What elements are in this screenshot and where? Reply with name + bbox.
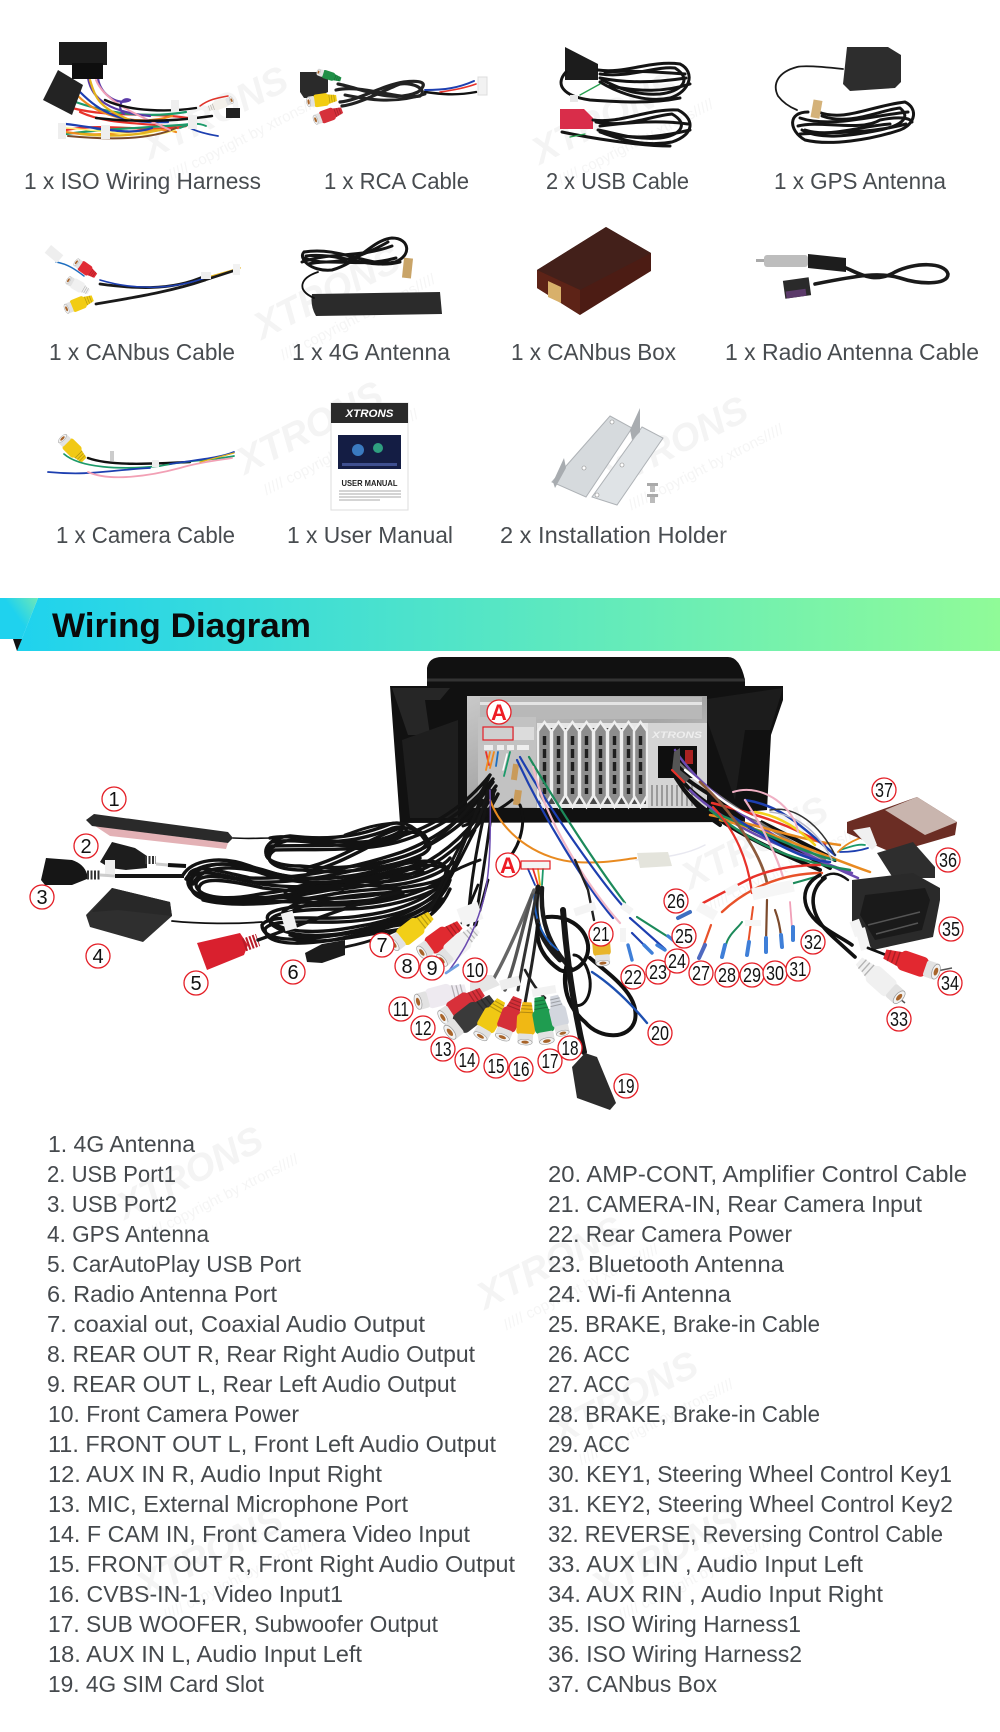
watermarks: XTRONS [543, 1344, 705, 1454]
watermarks: XTRONS [128, 1499, 290, 1609]
accessory captions: 1 x RCA Cable [324, 168, 469, 194]
legend list: items 20-37: 24. Wi-fi Antenna [548, 1281, 731, 1307]
numbered markers: 19 [618, 1076, 634, 1098]
legend list: items 1-19: 14. F CAM IN, Front Camera Video Input [48, 1521, 471, 1547]
4G SIM slot and black loops [537, 910, 647, 1110]
numbered markers: 18 [562, 1038, 578, 1060]
watermarks: XTRONS [523, 64, 685, 174]
lower A bundle [412, 861, 572, 1046]
numbered markers: 2 [80, 836, 92, 858]
watermarks: XTRONS [228, 374, 390, 484]
accessory captions: 2 x USB Cable [546, 168, 689, 194]
accessory captions: 1 x CANbus Box [511, 339, 676, 365]
legend list: items 1-19: 13. MIC, External Microphone Port [48, 1491, 409, 1517]
watermarks: ///// copyright by xtrons///// [261, 405, 422, 499]
orange wire and white connector [490, 800, 705, 868]
label 4 part: GPS antenna [86, 888, 262, 942]
numbered markers: 37 [875, 780, 893, 802]
label 35 part: ISO wiring harness 1 [850, 873, 940, 951]
numbered markers: 12 [414, 1018, 432, 1040]
icon: USB cables [560, 47, 690, 146]
label 36 part: ISO wiring harness 2 [877, 842, 935, 878]
watermarks: XTRONS [583, 1499, 745, 1609]
coiled black cables [183, 775, 498, 943]
numbered markers: 14 [458, 1050, 476, 1072]
numbered markers: 36 [939, 850, 957, 872]
numbered markers: 3 [36, 887, 48, 909]
numbered markers: 10 [466, 960, 484, 982]
watermarks: XTRONS [593, 389, 755, 499]
legend list: items 1-19: 1. 4G Antenna [48, 1131, 195, 1157]
rear camera and colour wires [517, 757, 674, 967]
legend list: items 1-19: 9. REAR OUT L, Rear Left Audio Output [47, 1371, 457, 1397]
rear RCA plugs 7 8 9 [385, 790, 490, 973]
legend list: items 1-19: 16. CVBS-IN-1, Video Input1 [48, 1581, 343, 1607]
legend list: items 1-19: 7. coaxial out, Coaxial Audio Output [47, 1311, 426, 1337]
numbered markers: 21 [592, 924, 610, 946]
icon: 4G antenna [302, 238, 442, 316]
legend list: items 20-37: 35. ISO Wiring Harness1 [548, 1611, 801, 1637]
numbered markers: 28 [718, 965, 736, 987]
watermarks: ///// copyright by xtrons///// [166, 90, 327, 184]
legend list: items 1-19 [47, 1131, 516, 1697]
numbered markers [30, 778, 963, 1098]
legend list: items 1-19: 4. GPS Antenna [47, 1221, 209, 1247]
connector callouts A: A [500, 853, 516, 878]
label 2 part: USB port 1 [100, 842, 186, 874]
legend list: items 1-19: 10. Front Camera Power [48, 1401, 299, 1427]
watermarks: XTRONS [133, 59, 295, 169]
numbered markers: 22 [624, 967, 642, 989]
watermarks: ///// copyright by xtrons///// [141, 1150, 302, 1244]
icon: CANbus box [537, 227, 651, 315]
watermarks: ///// copyright by xtrons///// [278, 270, 439, 364]
icon: RCA cable [300, 68, 487, 126]
numbered markers: 4 [92, 946, 104, 968]
legend list: items 20-37: 27. ACC [548, 1371, 630, 1397]
right side harness [672, 748, 870, 958]
legend list: items 1-19: 17. SUB WOOFER, Subwoofer Output [48, 1611, 439, 1637]
legend list: items 1-19: 18. AUX IN L, Audio Input Left [48, 1641, 363, 1667]
heading band: Wiring Diagram: Wiring Diagram [52, 607, 311, 645]
watermarks: XTRONS [468, 1209, 630, 1319]
connector callouts A: A [491, 700, 507, 725]
numbered markers: 6 [287, 962, 299, 984]
accessory captions: 1 x GPS Antenna [774, 168, 946, 194]
legend list: items 20-37: 26. ACC [548, 1341, 630, 1367]
labels 33 34 parts: AUX RCA plugs [852, 944, 952, 1007]
numbered markers: 16 [512, 1059, 530, 1081]
accessory captions: 1 x CANbus Cable [49, 339, 235, 365]
legend list: items 20-37: 25. BRAKE, Brake-in Cable [548, 1311, 820, 1337]
legend list: items 20-37: 33. AUX LIN , Audio Input Left [548, 1551, 864, 1577]
accessory captions: 1 x Camera Cable [56, 522, 235, 548]
watermarks: ///// copyright by xtrons///// [161, 1530, 322, 1624]
watermarks: XTRONS [108, 1119, 270, 1229]
numbered markers: 25 [675, 926, 693, 948]
numbered markers: 15 [488, 1056, 504, 1078]
legend list: items 20-37: 36. ISO Wiring Harness2 [548, 1641, 802, 1667]
label 1 part: 4G antenna [86, 814, 275, 849]
icon: user manual: XTRONS [344, 408, 394, 420]
head unit rear: XTRONS [651, 730, 702, 740]
numbered markers: 23 [649, 962, 667, 984]
icon: user manual: USER MANUAL [342, 478, 398, 488]
numbered markers: 20 [651, 1023, 669, 1045]
watermarks: ///// copyright by xtrons///// [576, 1375, 737, 1469]
numbered markers: 1 [108, 789, 120, 811]
legend list: items 1-19: 6. Radio Antenna Port [47, 1281, 278, 1307]
legend list: items 1-19: 19. 4G SIM Card Slot [48, 1671, 265, 1697]
legend list: items 1-19: 11. FRONT OUT L, Front Left Audio Output [48, 1431, 497, 1457]
label 37 part: CANbus box [847, 797, 957, 853]
numbered markers: 11 [393, 999, 409, 1021]
numbered markers: 34 [941, 973, 959, 995]
numbered markers: 32 [804, 932, 822, 954]
accessory captions: 1 x ISO Wiring Harness [24, 168, 261, 194]
heading band: Wiring Diagram [0, 598, 1000, 651]
icon: GPS antenna [776, 47, 914, 142]
watermarks: ///// copyright by xtrons///// [556, 95, 717, 189]
panel: wiring diagram [30, 657, 963, 1110]
numbered markers: 13 [434, 1039, 452, 1061]
legend list: items 20-37: 21. CAMERA-IN, Rear Camera Input [548, 1191, 923, 1217]
connector A wiring [463, 752, 523, 862]
legend list: items 1-19: 5. CarAutoPlay USB Port [47, 1251, 302, 1277]
legend list: items 1-19: 15. FRONT OUT R, Front Right Audio Output [48, 1551, 516, 1577]
accessory captions: 2 x Installation Holder [500, 522, 727, 548]
numbered markers: 8 [401, 956, 413, 978]
numbered markers: 17 [542, 1051, 558, 1073]
label 6 part: radio antenna port [305, 790, 488, 963]
head unit rear [390, 657, 783, 823]
legend list: items 20-37: 23. Bluetooth Antenna [548, 1251, 784, 1277]
legend list: items 20-37: 29. ACC [548, 1431, 630, 1457]
icon: radio antenna cable [756, 254, 948, 299]
accessory captions [24, 168, 979, 548]
legend list: items 20-37: 20. AMP-CONT, Amplifier Control Cable [548, 1161, 967, 1187]
accessory captions: 1 x 4G Antenna [292, 339, 450, 365]
label 3 part: USB port 2 [41, 858, 184, 885]
watermarks: XTRONS [673, 789, 835, 899]
legend list: items 1-19: 12. AUX IN R, Audio Input Right [48, 1461, 383, 1487]
numbered markers: 9 [426, 958, 438, 980]
panel: accessories [24, 42, 979, 548]
numbered markers: 24 [668, 951, 686, 973]
legend list: items 20-37: 31. KEY2, Steering Wheel Control Key2 [548, 1491, 953, 1517]
legend list: items 1-19: 8. REAR OUT R, Rear Right Audio Output [47, 1341, 476, 1367]
numbered markers: 31 [790, 959, 806, 981]
accessory captions: 1 x Radio Antenna Cable [725, 339, 979, 365]
numbered markers: 26 [667, 891, 685, 913]
numbered markers: 30 [766, 963, 784, 985]
watermarks: ///// copyright by xtrons///// [626, 420, 787, 514]
watermarks: ///// copyright by xtrons///// [706, 820, 867, 914]
numbered markers: 5 [190, 973, 202, 995]
icon: CANbus cable [45, 245, 240, 315]
legend list: items 20-37: 32. REVERSE, Reversing Control Cable [548, 1521, 943, 1547]
watermarks: XTRONS [245, 239, 407, 349]
legend list: items 20-37: 37. CANbus Box [548, 1671, 717, 1697]
watermarks: ///// copyright by xtrons///// [501, 1240, 662, 1334]
numbered markers: 33 [890, 1009, 908, 1031]
legend list: items 20-37: 34. AUX RIN , Audio Input Right [548, 1581, 884, 1607]
numbered markers: 27 [692, 963, 710, 985]
icon: ISO wiring harness [43, 42, 240, 139]
numbered markers: 35 [942, 919, 960, 941]
icon: camera cable [48, 432, 234, 477]
watermarks [108, 48, 867, 1629]
accessory captions: 1 x User Manual [287, 522, 453, 548]
legend list: items 20-37: 28. BRAKE, Brake-in Cable [548, 1401, 820, 1427]
watermarks: ///// copyright by xtrons///// [616, 1530, 777, 1624]
connector callouts A [483, 700, 550, 878]
legend list: items 1-19: 2. USB Port1 [47, 1161, 176, 1187]
icon: installation holder [552, 408, 663, 505]
icon: user manual [331, 403, 408, 510]
numbered markers: 7 [376, 935, 388, 957]
legend list: items 20-37 [548, 1161, 967, 1697]
label 5 part: CarAutoPlay USB port [197, 892, 400, 970]
numbered markers: 29 [743, 965, 761, 987]
legend list: items 20-37: 30. KEY1, Steering Wheel Control Key1 [548, 1461, 952, 1487]
legend list: items 1-19: 3. USB Port2 [47, 1191, 177, 1217]
legend list: items 20-37: 22. Rear Camera Power [548, 1221, 792, 1247]
